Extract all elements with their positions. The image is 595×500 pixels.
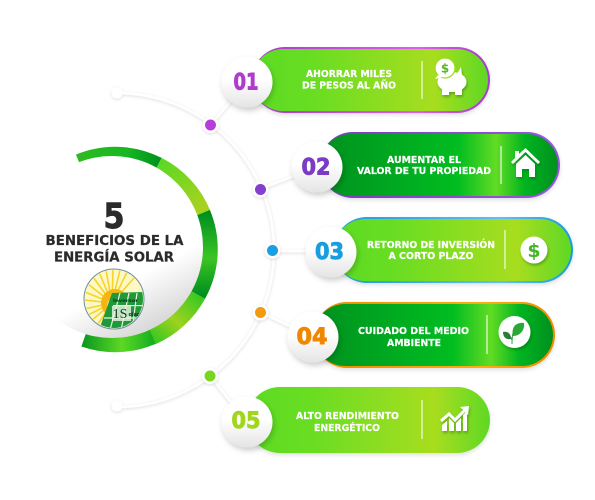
text 01: DE PESOS AL AÑO xyxy=(302,78,396,92)
logo xyxy=(84,269,146,330)
text 03 xyxy=(367,238,495,262)
heading: 5 xyxy=(104,197,124,237)
number badge 04 xyxy=(288,312,338,362)
icon: dollar coin xyxy=(520,236,548,264)
sun rays xyxy=(84,269,134,327)
dot 05 xyxy=(202,368,218,384)
pill 04 xyxy=(314,302,555,368)
icon: leaf xyxy=(498,316,530,348)
icon: dollar coin: $ xyxy=(527,240,541,262)
number badge 01 xyxy=(222,56,272,108)
number badge 04: 04 xyxy=(296,325,328,350)
text 02 xyxy=(357,155,491,177)
number badge 01: 01 xyxy=(234,70,258,96)
pill 02 xyxy=(320,132,560,198)
number badge 03 xyxy=(306,226,356,278)
icon: piggy bank xyxy=(435,58,466,95)
text 04 xyxy=(358,326,469,349)
main arc connecting the benefits xyxy=(112,82,331,422)
logo: olar xyxy=(128,312,140,318)
text 02: VALOR DE TU PROPIEDAD xyxy=(357,166,491,177)
heading: BENEFICIOS DE LA xyxy=(46,234,184,249)
text 04: AMBIENTE xyxy=(387,338,441,349)
sun disc xyxy=(101,289,124,312)
text 03: A CORTO PLAZO xyxy=(388,251,474,262)
progress ring xyxy=(79,155,210,344)
text 02: AUMENTAR EL xyxy=(387,155,462,166)
solar panels xyxy=(100,292,143,328)
logo: 1S xyxy=(113,307,127,322)
number badge 05: 05 xyxy=(232,409,260,434)
heading xyxy=(46,197,184,266)
icon: house xyxy=(511,148,540,177)
dot 04 xyxy=(252,304,268,320)
logo: Inversor xyxy=(113,298,139,304)
dot 02 xyxy=(252,182,268,198)
central circle xyxy=(21,155,210,344)
pill 01 xyxy=(252,47,490,113)
number badge 05 xyxy=(222,396,272,448)
number badge 03: 03 xyxy=(315,240,344,265)
text 05 xyxy=(296,411,399,434)
text 04: CUIDADO DEL MEDIO xyxy=(358,326,469,337)
icon: growth chart xyxy=(441,406,469,431)
text 05: ENERGÉTICO xyxy=(314,421,380,434)
dot 03 xyxy=(264,242,280,258)
dot 01 xyxy=(202,117,218,133)
number badge 02: 02 xyxy=(302,156,330,180)
pill 05 xyxy=(247,387,490,453)
icon: piggy bank: $ xyxy=(441,62,449,76)
text 01: AHORRAR MILES xyxy=(306,69,392,80)
text 01 xyxy=(302,69,396,92)
number badge 02 xyxy=(292,142,342,192)
text 03: RETORNO DE INVERSIÓN xyxy=(367,238,495,251)
text 05: ALTO RENDIMIENTO xyxy=(296,411,399,422)
heading: ENERGÍA SOLAR xyxy=(54,250,174,266)
pill 03 xyxy=(334,217,573,283)
